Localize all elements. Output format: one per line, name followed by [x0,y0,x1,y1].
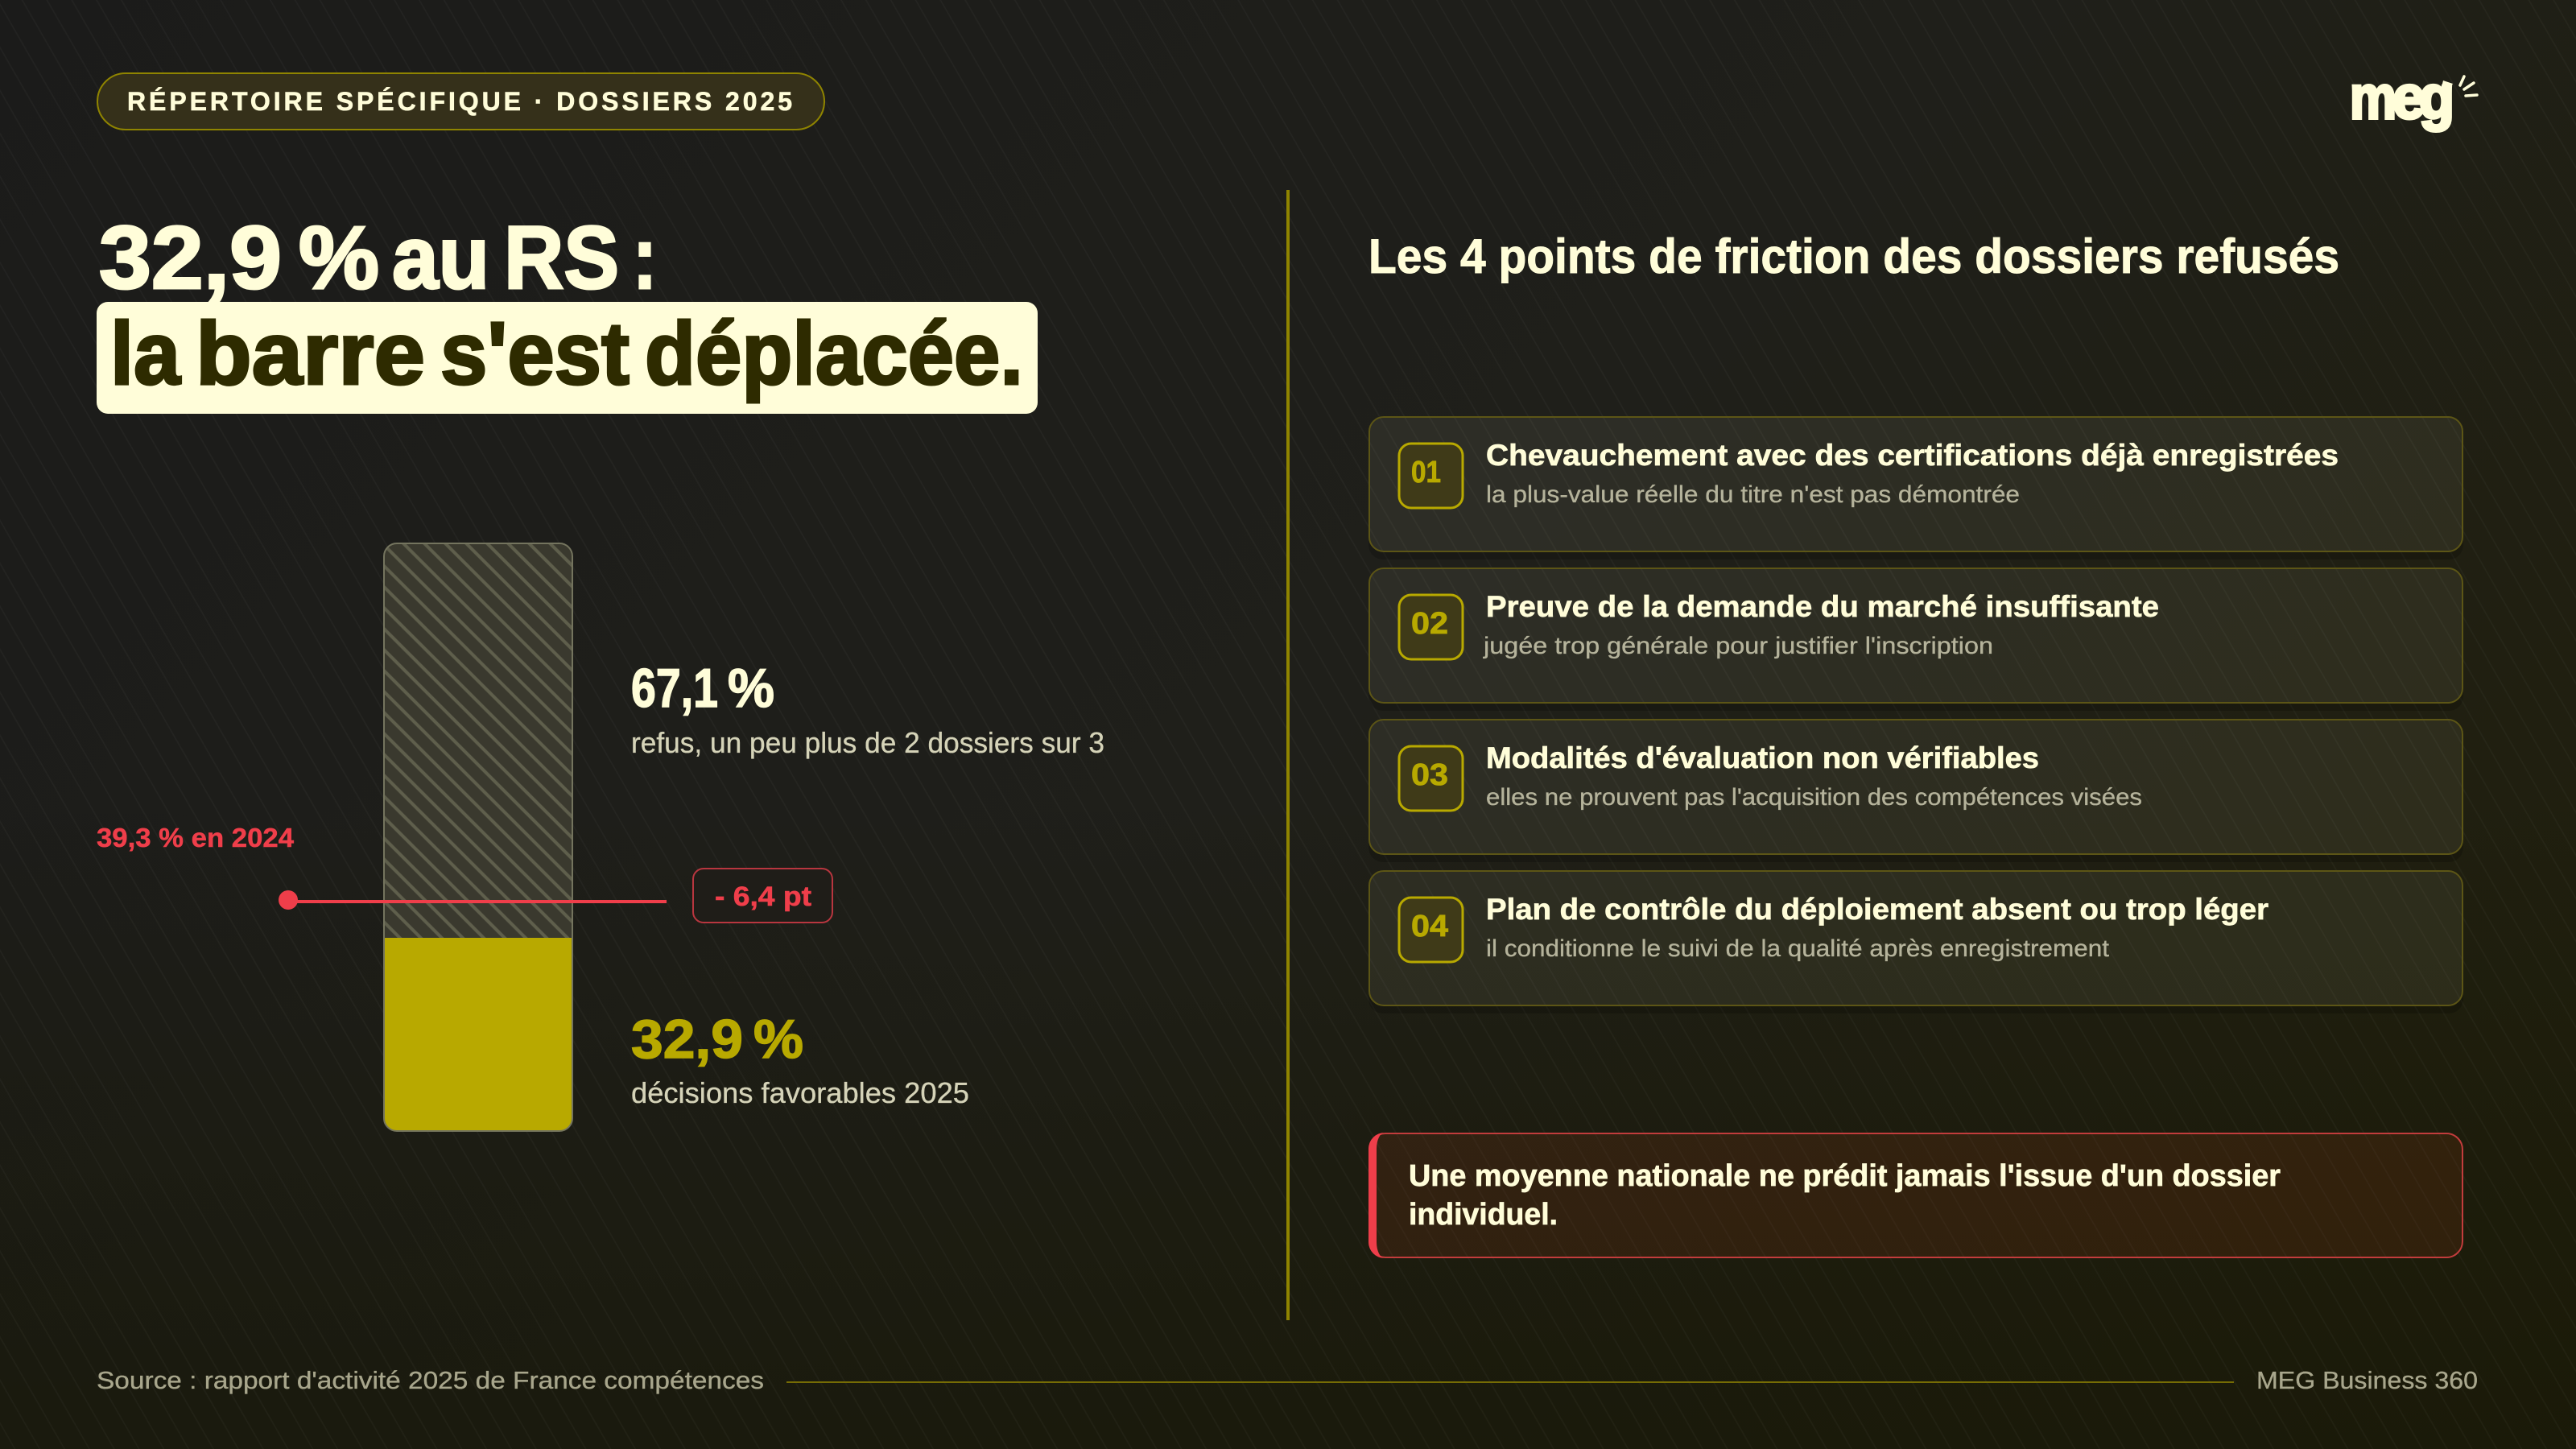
title: 32,9 [99,208,282,308]
badge: - 6,4 pt [693,869,832,923]
card 03: Modalités d'évaluation non vérifiables [1486,741,2039,774]
tag pill [97,73,824,130]
card 03 [1368,720,2463,862]
card 04: 04 [1411,910,1448,943]
card 01: 01 [1411,456,1441,489]
title: s'est [440,304,630,403]
title: % [299,208,379,308]
title: au [392,208,489,308]
callout: Une moyenne nationale ne prédit jamais l'issue d'un dossier [1409,1159,2281,1193]
card 01: Chevauchement avec des certifications déjà enregistrées [1486,439,2339,472]
vertical divider [1286,190,1290,1320]
title: RS [504,208,619,308]
title [97,208,1038,414]
footer brand: MEG Business 360 [2256,1366,2478,1394]
heading: right column: Les 4 points de friction des dossiers refusés [1368,229,2339,283]
label: 32,9 % favorables: 32,9 [631,1009,743,1070]
card 01: la plus-value réelle du titre n'est pas démontrée [1486,481,2020,508]
label: 67,1 % refus [631,658,1104,759]
card 02: jugée trop générale pour justifier l'inscription [1483,633,1993,659]
callout [1368,1133,2462,1258]
tag pill: RÉPERTOIRE SPÉCIFIQUE · DOSSIERS 2025 [127,87,792,116]
logo: meg: e [2392,64,2425,132]
card 02: Preuve de la demande du marché insuffisante [1486,590,2159,623]
stacked bar chart [384,543,572,1131]
badge: - 6,4 pt: - 6,4 pt [715,881,811,912]
label: 67,1 % refus: 67,1 [631,658,718,719]
footer source: Source : rapport d'activité 2025 de France compétences [97,1366,764,1394]
label: 67,1 % refus: refus, un peu plus de 2 dossiers sur 3 [631,726,1104,759]
marker: 39,3 % en 2024: 39,3 % en 2024 [97,823,295,852]
title: : [633,208,657,308]
footer rule [786,1381,2234,1383]
label: 32,9 % favorables [631,1009,969,1109]
title: déplacée. [645,304,1023,403]
title: la [110,304,181,403]
label: 67,1 % refus: % [728,658,774,719]
card 03: 03 [1411,758,1448,792]
label: 32,9 % favorables: décisions favorables 2025 [631,1076,969,1109]
title: barre [196,304,425,403]
card 04 [1368,871,2463,1013]
logo: meg [2350,64,2477,132]
card 02 [1368,568,2463,711]
logo: meg: g [2419,64,2454,132]
label: 32,9 % favorables: % [753,1009,803,1070]
marker: 39,3 % en 2024 [97,823,667,910]
card 02: 02 [1411,607,1448,641]
card 04: Plan de contrôle du déploiement absent ou trop léger [1486,893,2268,926]
logo: meg: m [2350,64,2396,132]
card 01 [1368,417,2463,559]
callout: individuel. [1409,1198,1558,1232]
card 03: elles ne prouvent pas l'acquisition des compétences visées [1486,784,2142,811]
card 04: il conditionne le suivi de la qualité après enregistrement [1486,935,2110,962]
